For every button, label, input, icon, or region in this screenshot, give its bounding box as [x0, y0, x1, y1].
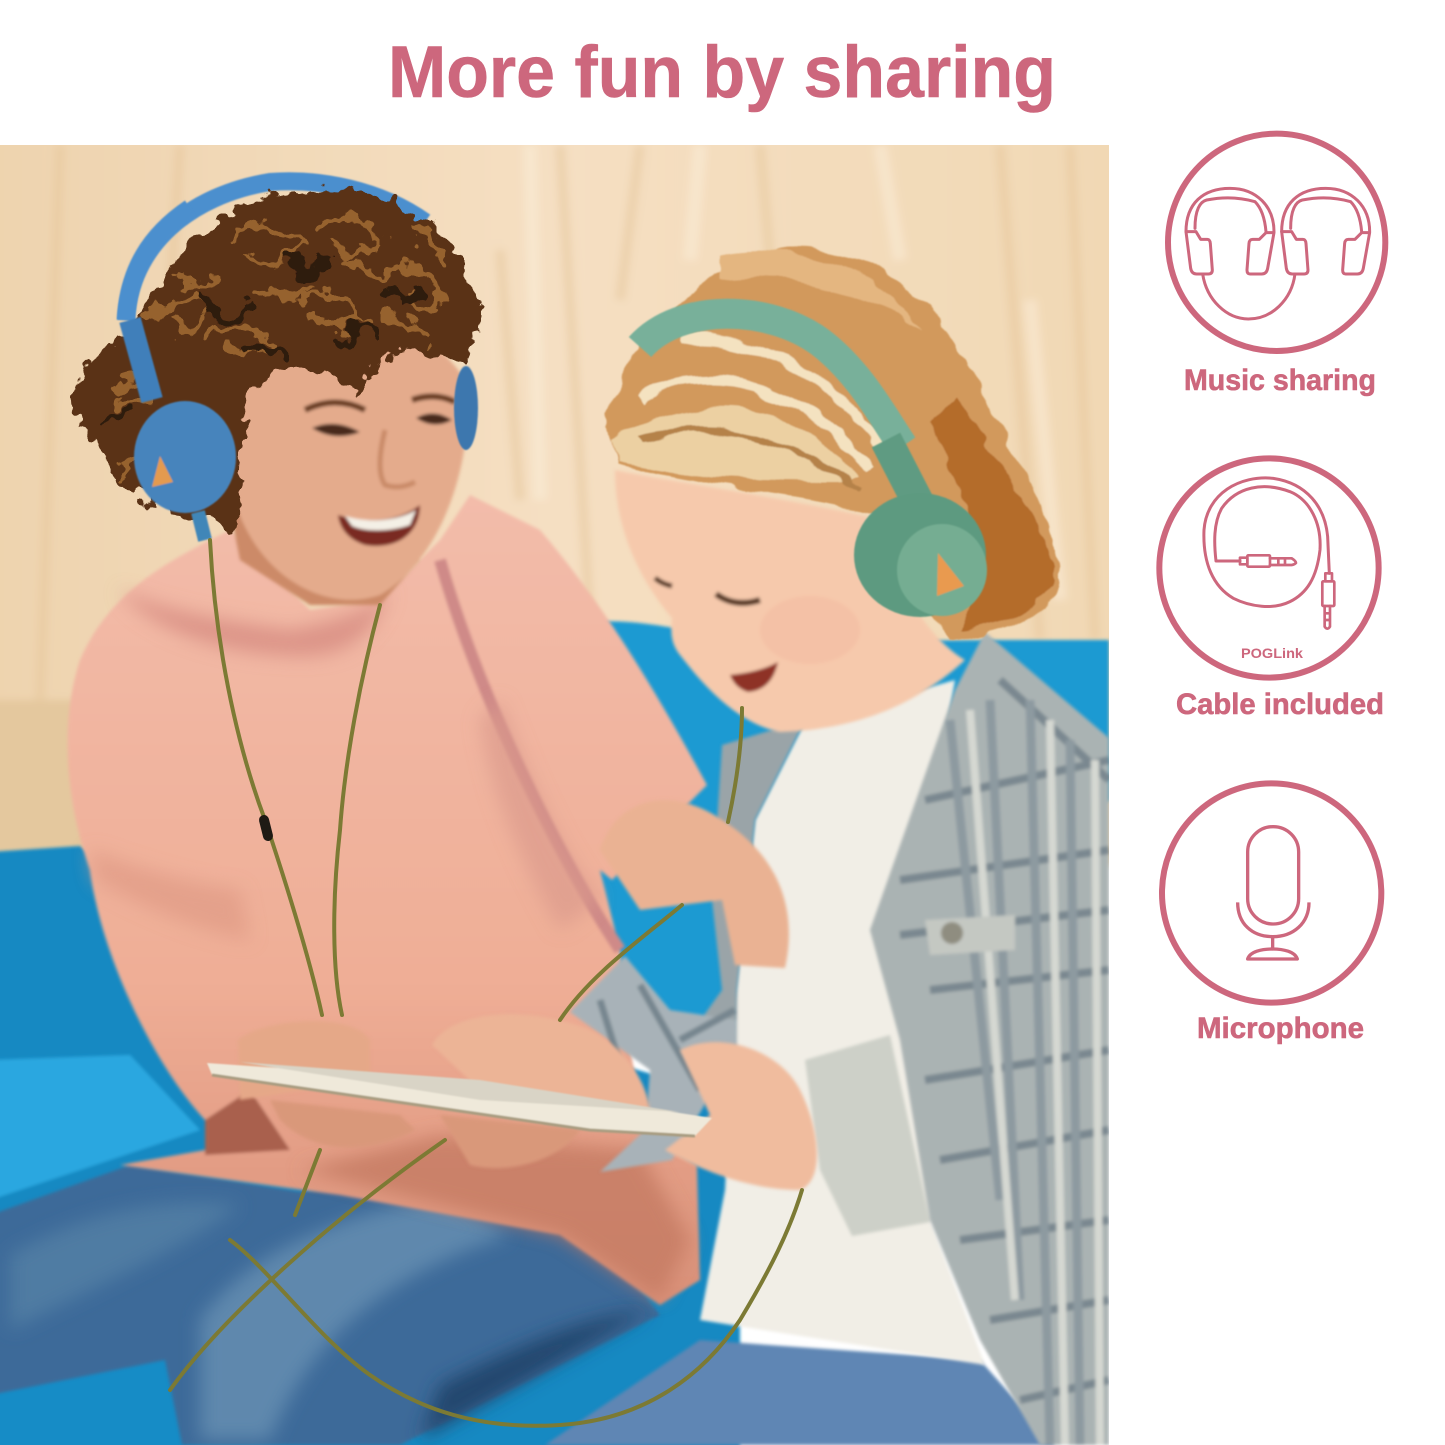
- label: microphone: Microphone: [1197, 1012, 1364, 1045]
- wood wall background: [0, 135, 1120, 865]
- mic cradle and stand: [1238, 902, 1309, 959]
- vertical jack plug: [1322, 573, 1334, 629]
- left child hoodie: [68, 495, 707, 1305]
- blue sofa: [0, 621, 1109, 1445]
- right child plaid shirt: [570, 632, 1109, 1445]
- left child jeans: [0, 1165, 660, 1445]
- label: cable included: Cable included: [1176, 688, 1384, 721]
- title: More fun by sharing: [388, 32, 1056, 113]
- label: music sharing: Music sharing: [1184, 364, 1376, 397]
- small cable name: POGLink: [1241, 645, 1303, 661]
- left headphones: [1186, 188, 1274, 274]
- left child curly hair: [77, 188, 478, 530]
- right child hair: [605, 249, 1060, 640]
- icon: cable: [1159, 458, 1379, 678]
- tablet: [207, 1062, 712, 1136]
- circle outline: [1168, 134, 1385, 351]
- circle outline: [1162, 783, 1381, 1003]
- left child headband behind hair: [126, 181, 425, 320]
- hands holding the tablet: [238, 1014, 817, 1190]
- coiled cable: [1204, 478, 1329, 606]
- right child white t-shirt: [700, 680, 985, 1365]
- mic capsule: [1248, 827, 1299, 924]
- hoodie folds: [90, 590, 690, 1300]
- horizontal jack plug: [1240, 555, 1296, 567]
- left child hand on the sleeve: [600, 800, 789, 968]
- photo: two children sharing a tablet with headphones: [0, 135, 1120, 1445]
- left child blue headphones: [126, 208, 478, 540]
- left child neck and face: [232, 346, 466, 607]
- shared cable loop: [1203, 274, 1295, 319]
- right child green headphones: [640, 314, 987, 617]
- headphone cables: [170, 540, 802, 1426]
- icon: microphone: [1162, 783, 1381, 1003]
- circle outline: [1159, 458, 1379, 678]
- jeans highlights and shadows: [10, 1195, 650, 1440]
- right headphones: [1282, 188, 1370, 274]
- right child face: [615, 470, 965, 732]
- icon: music sharing: [1168, 134, 1385, 351]
- right child jeans: [545, 1340, 1055, 1445]
